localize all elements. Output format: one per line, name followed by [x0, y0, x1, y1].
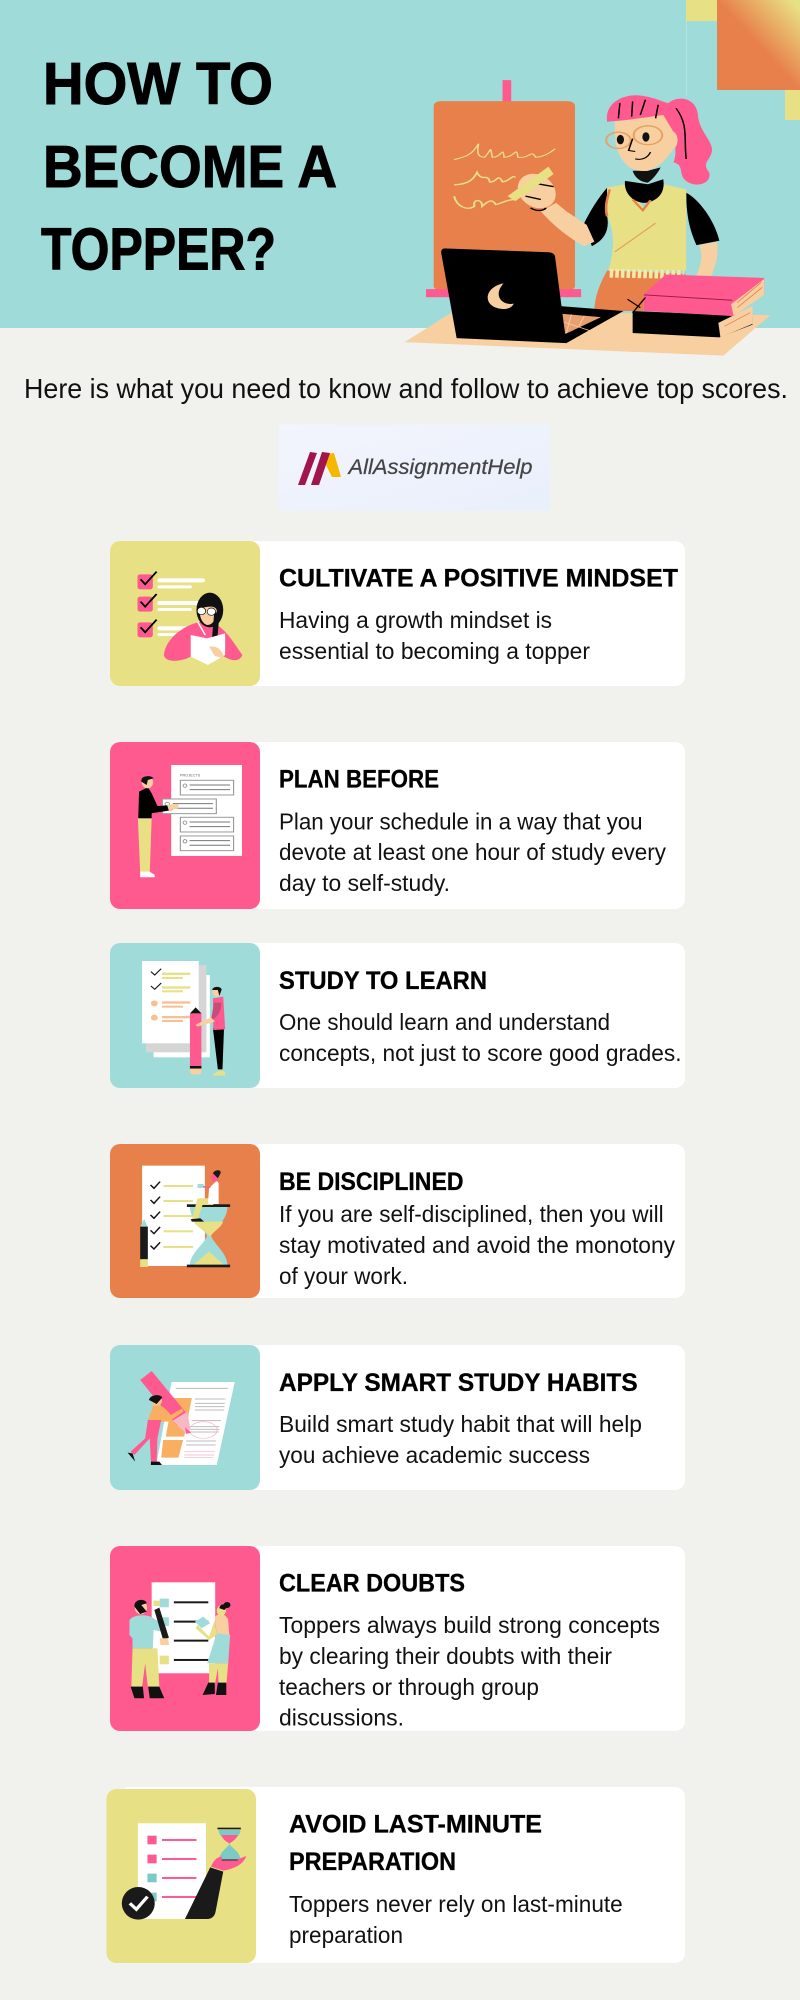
logo: AllAssignmentHelp	[279, 424, 550, 510]
icon panel: checklist and reader	[110, 541, 260, 686]
body text: you achieve academic success	[279, 1442, 590, 1468]
logo mark	[298, 452, 341, 485]
body text	[279, 1411, 642, 1468]
corner decoration	[686, 0, 800, 120]
desk	[405, 311, 770, 356]
panel: clear doubts	[110, 1546, 685, 1731]
body text: Having a growth mindset is	[279, 607, 552, 633]
body text: teachers or through group	[279, 1674, 539, 1700]
body text: Plan your schedule in a way that you	[279, 808, 643, 834]
body text: preparation	[289, 1922, 403, 1948]
body text	[289, 1891, 623, 1948]
panel: apply smart study habits	[110, 1345, 685, 1490]
panel: study to learn	[110, 943, 685, 1088]
body text: If you are self-disciplined, then you will	[279, 1201, 664, 1227]
student	[508, 95, 719, 311]
easel board	[426, 80, 581, 297]
body text: discussions.	[279, 1705, 404, 1731]
body text: devote at least one hour of study every	[279, 839, 667, 865]
panel: plan before	[110, 742, 685, 909]
heading: APPLY SMART STUDY HABITS	[279, 1369, 638, 1397]
heading: PLAN BEFORE	[279, 766, 439, 794]
heading	[289, 1811, 542, 1876]
body text	[279, 1201, 676, 1289]
body text: by clearing their doubts with their	[279, 1643, 612, 1669]
laptop	[441, 248, 623, 343]
body text	[279, 607, 590, 664]
body text	[279, 1009, 682, 1066]
stacked books	[628, 275, 764, 337]
heading: BE DISCIPLINED	[279, 1168, 464, 1196]
title	[41, 50, 337, 282]
heading: CULTIVATE A POSITIVE MINDSET	[279, 565, 678, 593]
body text: day to self-study.	[279, 870, 450, 896]
icon panel: project board	[110, 742, 260, 909]
body text: essential to becoming a topper	[279, 638, 590, 664]
subtitle: Here is what you need to know and follow to achieve top scores.	[24, 373, 788, 404]
body text: Toppers never rely on last-minute	[289, 1891, 623, 1917]
illustration: student at easel with laptop and books	[405, 80, 770, 356]
panel: avoid last-minute preparation	[106, 1787, 685, 1963]
icon panel: hourglass and checklist	[110, 1144, 260, 1298]
icon panel: two people at a checklist	[110, 1546, 260, 1731]
heading: AVOID LAST-MINUTE	[289, 1811, 542, 1839]
body text: One should learn and understand	[279, 1009, 610, 1035]
logo: AllAssignmentHelp: AllAssignmentHelp	[346, 456, 532, 479]
heading: CLEAR DOUBTS	[279, 1570, 465, 1598]
icon panel: hourglass in hand	[106, 1789, 256, 1963]
title: TOPPER?	[41, 216, 276, 282]
panel: cultivate a positive mindset	[110, 541, 685, 686]
body text	[279, 808, 667, 896]
title: HOW TO	[43, 50, 273, 117]
icon panel: project board: PROJECTS	[180, 774, 201, 777]
body text: concepts, not just to score good grades.	[279, 1040, 682, 1066]
body text	[279, 1612, 660, 1731]
icon panel: giant highlighter and page	[110, 1345, 260, 1490]
heading: STUDY TO LEARN	[279, 967, 487, 995]
body text: stay motivated and avoid the monotony	[279, 1232, 676, 1258]
body text: Build smart study habit that will help	[279, 1411, 642, 1437]
title: BECOME A	[43, 133, 337, 200]
heading: PREPARATION	[289, 1848, 456, 1876]
body text: Toppers always build strong concepts	[279, 1612, 660, 1638]
body text: of your work.	[279, 1263, 408, 1289]
panel: be disciplined	[110, 1144, 685, 1298]
header banner	[0, 0, 800, 328]
icon panel: papers and pencil	[110, 943, 260, 1088]
